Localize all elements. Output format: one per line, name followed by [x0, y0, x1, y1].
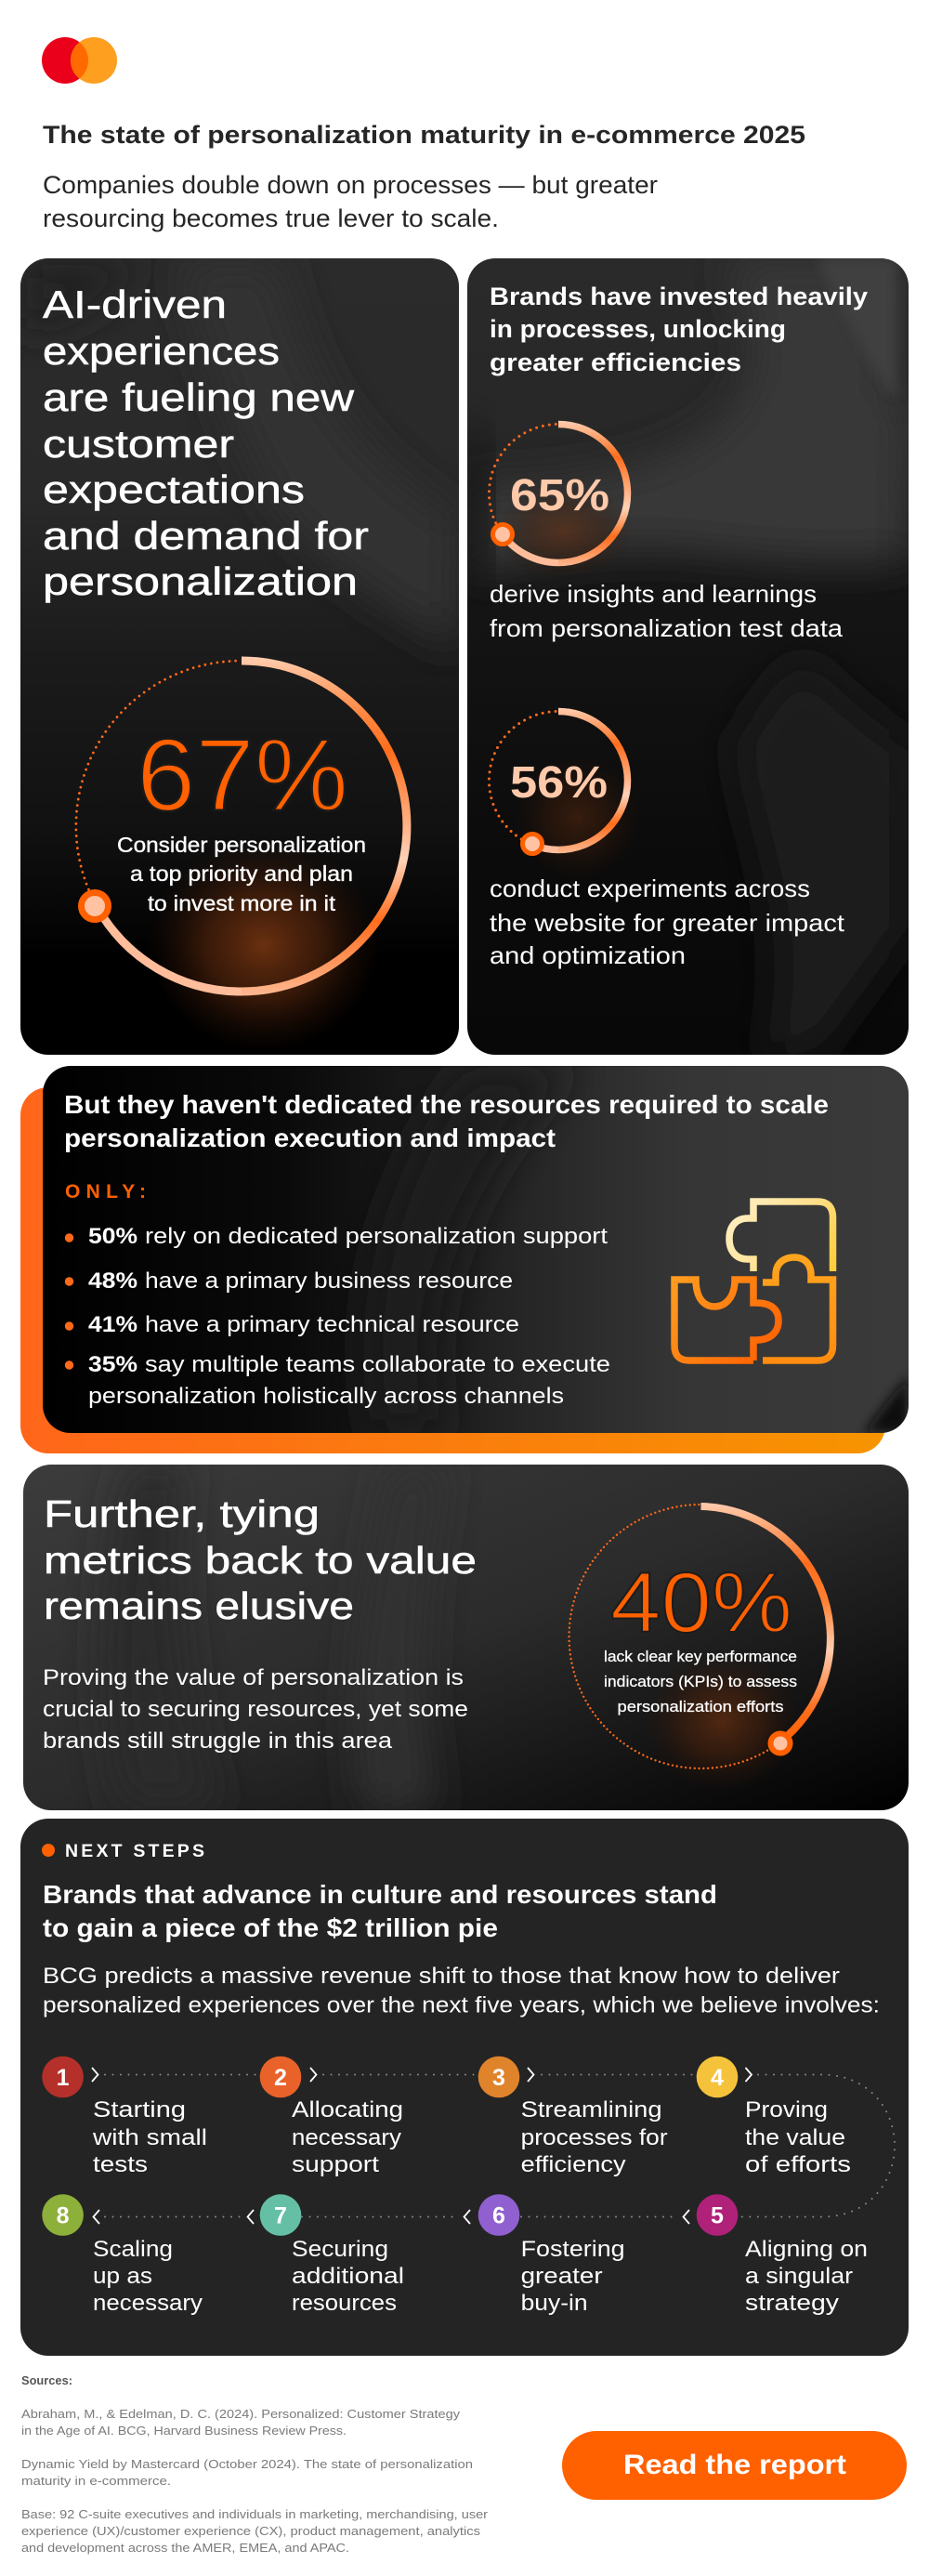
- sources: [21, 2373, 489, 2555]
- heading: [490, 283, 868, 376]
- step 5: 5: [711, 2202, 724, 2228]
- step 1: 1: [57, 2065, 70, 2091]
- step 4: Proving: [745, 2097, 828, 2123]
- label: only: ONLY:: [65, 1181, 146, 1203]
- stat caption: and optimization: [490, 941, 686, 969]
- step 2: Allocating: [292, 2097, 403, 2123]
- panel: next steps: [20, 1819, 909, 2356]
- heading: to gain a piece of the $2 trillion pie: [43, 1913, 498, 1942]
- bullet 2: 48%: [88, 1268, 137, 1294]
- body text: crucial to securing resources, yet some: [43, 1697, 468, 1722]
- bullet 4: personalization holistically across channels: [88, 1384, 564, 1409]
- step 3: [478, 2057, 668, 2177]
- heading: in processes, unlocking: [490, 315, 786, 343]
- sources: Base: 92 C-suite executives and individuals in marketing, merchandising, user: [21, 2507, 489, 2521]
- ring chart: 65%: [489, 424, 628, 563]
- heading: But they haven't dedicated the resources required to scale: [64, 1090, 829, 1119]
- stat caption: the website for greater impact: [490, 909, 845, 937]
- stat caption: [490, 874, 845, 969]
- bullet 4: say multiple teams collaborate to execute: [145, 1352, 610, 1377]
- bullet list: [65, 1224, 610, 1409]
- step 3: Streamlining: [521, 2097, 662, 2123]
- button: read the report: [562, 2431, 907, 2500]
- stat: 65%: 65%: [510, 471, 609, 520]
- stat caption: lack clear key performance: [604, 1649, 797, 1665]
- panel: AI-driven experiences: [20, 258, 459, 1055]
- title: The state of personalization maturity in e-commerce 2025: [43, 121, 805, 149]
- step 6: [478, 2194, 625, 2316]
- dotted path connector: [105, 2074, 895, 2217]
- step 6: 6: [492, 2202, 505, 2228]
- bullet 1: 50%: [88, 1224, 137, 1249]
- panel: resources: [20, 1066, 909, 1453]
- heading: experiences: [43, 329, 280, 373]
- body text: [43, 1964, 880, 2018]
- body text: [43, 1665, 468, 1754]
- step 5: strategy: [745, 2291, 840, 2316]
- stat caption: to invest more in it: [148, 891, 336, 915]
- bullet 3: have a primary technical resource: [145, 1312, 519, 1337]
- step 1: Starting: [93, 2097, 186, 2123]
- sources: in the Age of AI. BCG, Harvard Business Review Press.: [21, 2424, 347, 2438]
- stat caption: from personalization test data: [490, 614, 844, 642]
- ring chart: 67%: [76, 661, 407, 992]
- stat: 67%: 67%: [137, 718, 348, 833]
- step 2: necessary: [292, 2125, 402, 2150]
- heading: personalization: [43, 559, 358, 603]
- stat caption: personalization efforts: [617, 1699, 784, 1715]
- sources: Dynamic Yield by Mastercard (October 2024). The state of personalization: [21, 2457, 473, 2471]
- step 1: [42, 2057, 207, 2177]
- sources: and development across the AMER, EMEA, and APAC.: [21, 2541, 349, 2555]
- heading: and demand for: [43, 514, 369, 558]
- body text: personalized experiences over the next five years, which we believe involves:: [43, 1992, 880, 2018]
- heading: AI-driven: [43, 283, 227, 326]
- stat caption: [490, 580, 844, 642]
- subtitle: Companies double down on processes — but greater: [43, 171, 658, 199]
- step 4: [697, 2057, 851, 2177]
- heading: Further, tying: [44, 1492, 320, 1535]
- step 6: Fostering: [521, 2237, 625, 2262]
- ring chart: 56%: [489, 711, 628, 853]
- heading: [64, 1090, 829, 1152]
- heading: expectations: [43, 467, 305, 511]
- step 7: resources: [292, 2291, 397, 2316]
- ring chart: 40%: [569, 1505, 831, 1768]
- step 7: additional: [292, 2264, 404, 2289]
- step 8: Scaling: [93, 2237, 173, 2262]
- step 4: of efforts: [745, 2152, 851, 2177]
- subtitle: resourcing becomes true lever to scale.: [43, 204, 499, 232]
- step 7: Securing: [292, 2237, 388, 2262]
- step 4: the value: [745, 2125, 845, 2150]
- heading: personalization execution and impact: [64, 1124, 556, 1152]
- heading: customer: [43, 422, 234, 466]
- step 4: 4: [711, 2065, 724, 2091]
- stat caption: indicators (KPIs) to assess: [604, 1674, 797, 1690]
- step 8: [42, 2194, 203, 2316]
- stat caption: a top priority and plan: [130, 861, 353, 886]
- step 8: 8: [57, 2202, 70, 2228]
- step 2: [260, 2057, 403, 2177]
- orange backing shape: [20, 1087, 885, 1453]
- step 3: 3: [492, 2065, 505, 2091]
- logo: Mastercard circles: [42, 37, 117, 84]
- panel: brands invested in processes: [467, 258, 909, 1055]
- stat caption: [604, 1649, 797, 1715]
- body text: BCG predicts a massive revenue shift to those that know how to deliver: [43, 1964, 840, 1989]
- heading: remains elusive: [44, 1584, 354, 1627]
- chevrons: [92, 2068, 752, 2224]
- panel: metrics: [23, 1465, 909, 1810]
- body text: brands still struggle in this area: [43, 1728, 393, 1754]
- step 3: processes for: [521, 2125, 668, 2150]
- icon: puzzle pieces: [674, 1202, 832, 1360]
- stat caption: conduct experiments across: [490, 874, 810, 902]
- heading: metrics back to value: [44, 1539, 477, 1582]
- step 1: tests: [93, 2152, 148, 2177]
- bullet 2: have a primary business resource: [145, 1268, 513, 1294]
- button: read the report: Read the report: [623, 2450, 846, 2480]
- sources: maturity in e-commerce.: [21, 2474, 171, 2488]
- sources: Sources:: [21, 2373, 72, 2387]
- step 7: [260, 2194, 404, 2316]
- step 5: [697, 2194, 868, 2316]
- heading: greater efficiencies: [490, 348, 741, 376]
- step 8: up as: [93, 2264, 152, 2289]
- heading: [44, 1492, 477, 1627]
- step 3: efficiency: [521, 2152, 626, 2177]
- subtitle: [43, 171, 658, 232]
- step 7: 7: [274, 2202, 287, 2228]
- step 5: a singular: [745, 2264, 853, 2289]
- stat caption: [117, 833, 366, 915]
- bullet 4: 35%: [88, 1352, 137, 1377]
- sources: experience (UX)/customer experience (CX), product management, analytics: [21, 2524, 481, 2538]
- sources: Abraham, M., & Edelman, D. C. (2024). Personalized: Customer Strategy: [21, 2407, 461, 2421]
- dark card: [43, 1066, 909, 1433]
- step 6: greater: [521, 2264, 603, 2289]
- body text: Proving the value of personalization is: [43, 1665, 464, 1690]
- bullet 4: [65, 1352, 610, 1409]
- step 8: necessary: [93, 2291, 203, 2316]
- step 5: Aligning on: [745, 2237, 868, 2262]
- stat caption: Consider personalization: [117, 833, 366, 857]
- heading: [43, 283, 369, 603]
- stat caption: derive insights and learnings: [490, 580, 817, 608]
- step 6: buy-in: [521, 2291, 588, 2316]
- heading: are fueling new: [43, 375, 355, 419]
- heading: [43, 1880, 717, 1942]
- heading: Brands that advance in culture and resources stand: [43, 1880, 717, 1909]
- bullet 1: rely on dedicated personalization support: [145, 1224, 608, 1249]
- stat: 40%: 40%: [610, 1556, 792, 1650]
- heading: Brands have invested heavily: [490, 283, 868, 310]
- bullet 3: 41%: [88, 1312, 137, 1337]
- label: next steps: NEXT STEPS: [65, 1841, 204, 1861]
- step 1: with small: [92, 2125, 207, 2150]
- stat: 56%: 56%: [510, 758, 608, 808]
- step 2: support: [292, 2152, 379, 2177]
- step 2: 2: [274, 2065, 287, 2091]
